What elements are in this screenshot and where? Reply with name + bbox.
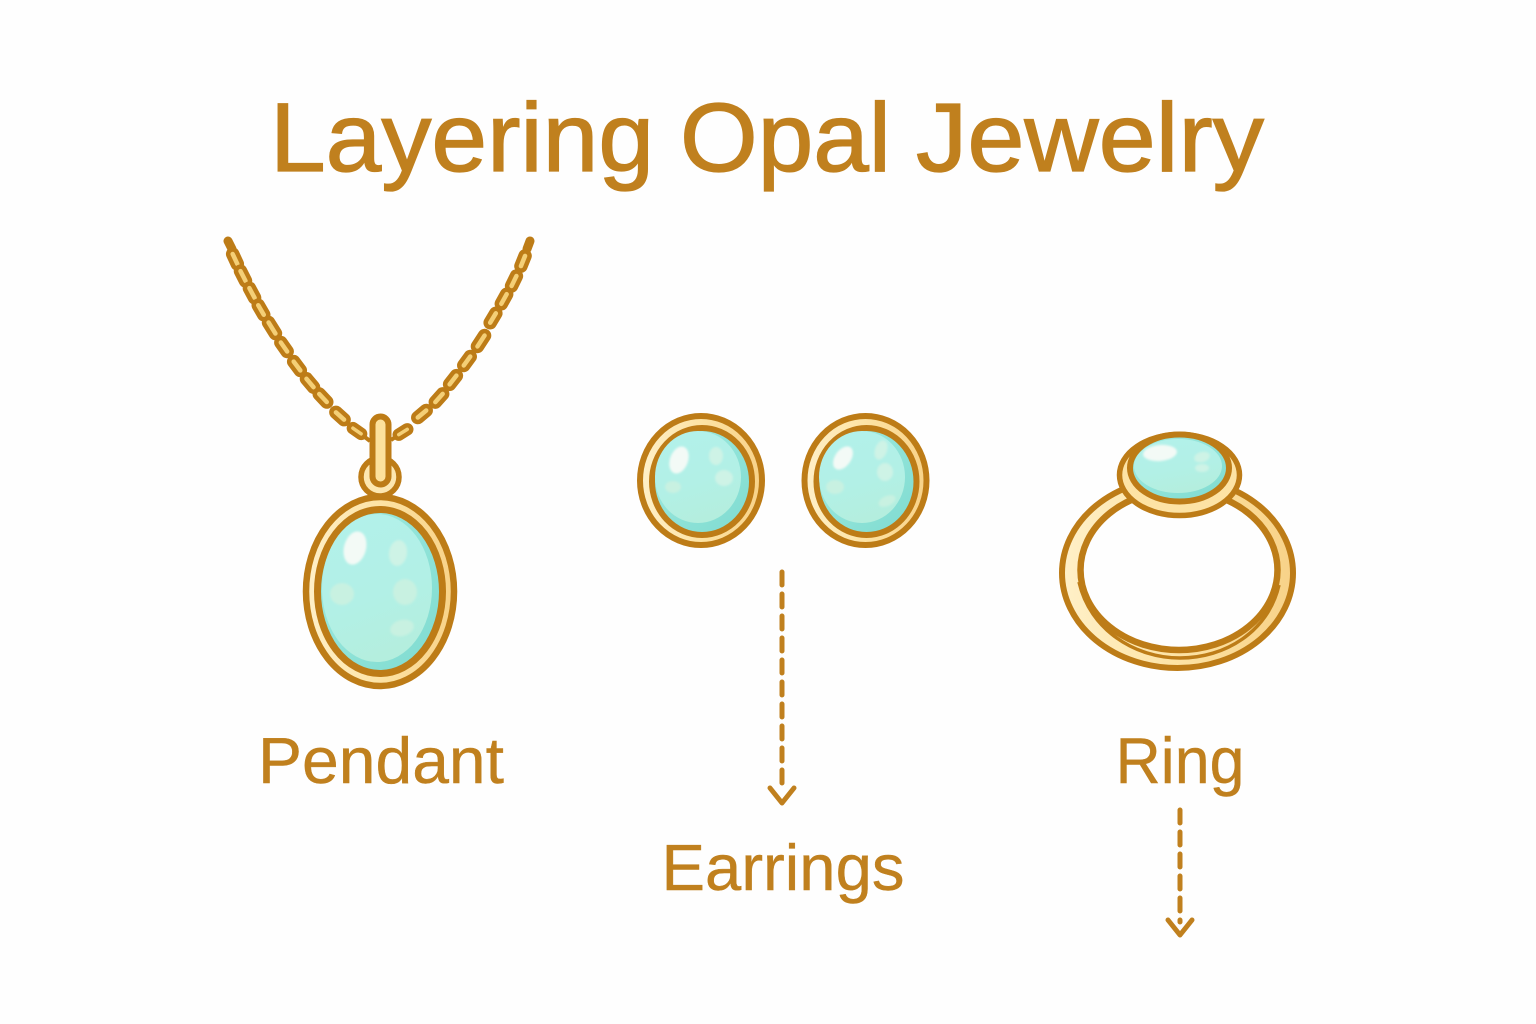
icon: right earring bbox=[804, 416, 926, 545]
setting bbox=[1120, 434, 1240, 516]
arrow: ring bbox=[1168, 810, 1192, 935]
label: earrings: Earrings bbox=[662, 831, 904, 904]
icon: ring bbox=[1062, 434, 1293, 668]
arrow: earrings bbox=[770, 572, 794, 803]
title bbox=[270, 83, 1265, 192]
opal face bbox=[322, 514, 432, 662]
icon: left earring bbox=[640, 416, 762, 545]
chain: right strand bbox=[391, 241, 531, 440]
band bbox=[1062, 478, 1293, 668]
bail bbox=[372, 416, 388, 484]
icon: pendant necklace bbox=[227, 241, 531, 686]
label: pendant: Pendant bbox=[258, 724, 504, 797]
label: ring: Ring bbox=[1116, 724, 1244, 797]
chain: left strand bbox=[227, 241, 370, 441]
title: Opal bbox=[680, 83, 891, 192]
title: Jewelry bbox=[916, 83, 1265, 192]
bail ring bbox=[361, 458, 399, 496]
title: Layering bbox=[270, 83, 654, 192]
pendant setting bbox=[306, 497, 454, 686]
opal highlights bbox=[330, 529, 417, 639]
